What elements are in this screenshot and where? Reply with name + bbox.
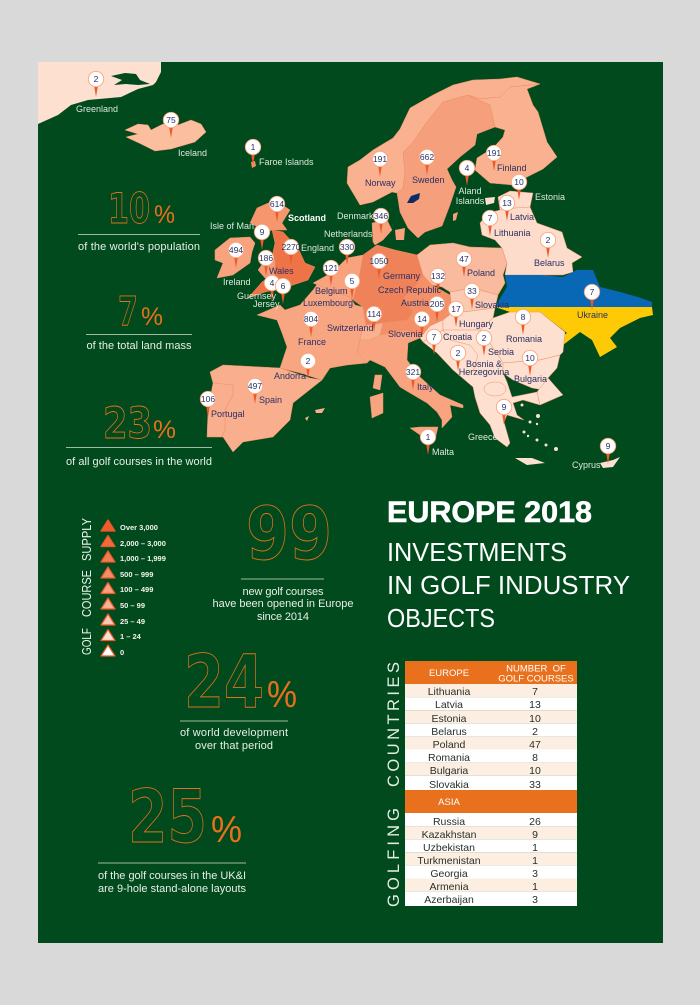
country labels: Finland: [497, 163, 527, 173]
pin: Malta 1: [420, 429, 436, 455]
country labels: Ukraine: [577, 310, 608, 320]
country labels: Hungary: [459, 319, 494, 329]
table rows: Europe: Lithuania: [428, 686, 470, 698]
pin: Poland 47: 47: [459, 254, 469, 264]
pin: Netherlands 330: [339, 239, 355, 265]
map of Europe: [38, 62, 653, 470]
vertical heading: golfing countries: COUNTRIES: [385, 662, 403, 787]
pin: Norway 191: [372, 151, 388, 177]
pin: Bulgaria 10: 10: [525, 353, 535, 363]
pin: Isle of Man 9: 9: [260, 227, 265, 237]
stat: 23% of all golf courses: of all golf courses in the world: [66, 456, 212, 468]
region: Italy: [305, 330, 463, 440]
table rows: Asia: Russia: [433, 816, 465, 828]
vertical heading: golfing countries: GOLFING: [385, 808, 403, 907]
pin: Ireland 494: 494: [229, 245, 243, 255]
region: Greenland: [38, 62, 161, 124]
region: Spain and Portugal: [207, 365, 322, 452]
country labels: England: [301, 243, 334, 253]
region: Romania and Moldova: [480, 312, 565, 363]
pin: Belarus 2: [540, 232, 556, 258]
country labels: Spain: [259, 395, 282, 405]
pin: Romania 8: [515, 309, 531, 335]
table header: Europe: EUROPE: [429, 668, 469, 679]
pin: Ukraine 7: [584, 284, 600, 310]
pin: Sweden 662: [419, 149, 435, 175]
region: France: [257, 283, 367, 380]
country labels: Estonia: [535, 192, 565, 202]
pin: Croatia 7: [426, 329, 442, 355]
country labels: Croatia: [443, 332, 472, 342]
stat: 10% of world's population: [78, 184, 200, 253]
table rows: Europe: 33: [529, 779, 541, 791]
table rows: Europe: 2: [532, 726, 538, 738]
stat: 25% of UK&I golf courses: are 9-hole stand-alone layouts: [98, 883, 246, 895]
stat: 99 new golf courses: [212, 492, 354, 623]
legend labels: 100 – 499: [120, 585, 153, 594]
pin: Malta 1: 1: [426, 432, 431, 442]
country labels: Denmark: [337, 211, 374, 221]
table rows: Europe: Latvia: [435, 699, 463, 711]
country labels: Aland: [458, 186, 482, 196]
country labels: Isle of Man: [210, 221, 254, 231]
table rows: Asia: 1: [532, 842, 538, 854]
country labels: Scotland: [288, 213, 326, 223]
country labels: Belarus: [534, 258, 565, 268]
pin: Aland Islands 4: [459, 160, 475, 186]
region: Hungary: [443, 308, 495, 332]
pin: France 804: [303, 311, 319, 337]
table rows: Europe: Estonia: [431, 713, 467, 725]
pin: Slovenia 14: [414, 311, 430, 337]
stat: 25% of UK&I golf courses: 25: [128, 775, 207, 860]
region: Poland: [417, 243, 507, 295]
pin: Latvia 13: [499, 195, 515, 221]
pin: Sweden 662: 662: [420, 152, 434, 162]
pin: Wales 186: 186: [259, 253, 273, 263]
stat: 99 new golf courses: 99: [246, 492, 332, 577]
legend labels: Over 3,000: [120, 523, 158, 532]
country labels: Greenland: [76, 104, 118, 114]
table rows: Europe: 8: [532, 752, 538, 764]
region: Greek islands: [515, 404, 558, 465]
table rows: Europe: 10: [529, 765, 541, 777]
table header: Asia: [405, 790, 577, 813]
stat: 7% of total land mass: of the total land mass: [86, 340, 192, 352]
table rows: Asia: Azerbaijan: [424, 894, 474, 906]
pin: Hungary 17: [448, 301, 464, 327]
country labels: Cyprus: [572, 460, 601, 470]
country labels: Belgium: [315, 286, 348, 296]
country labels: Sweden: [412, 175, 445, 185]
pin: Poland 47: [456, 251, 472, 277]
pin: Bulgaria 10: [522, 350, 538, 376]
region: Finland: [468, 84, 557, 185]
stat: 24% of world development: [180, 640, 297, 752]
pin: Croatia 7: 7: [432, 332, 437, 342]
pin: Denmark 346: [373, 208, 389, 234]
pin: Lithuania 7: [482, 210, 498, 236]
table rows: Asia: Uzbekistan: [423, 842, 475, 854]
table rows: Europe: Belarus: [431, 726, 467, 738]
pin: Greece 9: [496, 399, 512, 425]
legend title: COURSE: [80, 570, 94, 617]
pin: Belgium 121: 121: [324, 263, 338, 273]
title: [387, 496, 630, 633]
stat: 25% of UK&I golf courses: [98, 775, 246, 895]
pin: Belarus 2: 2: [546, 235, 551, 245]
country labels: Austria: [401, 298, 429, 308]
country labels: Malta: [432, 447, 454, 457]
stat: 99 new golf courses: new golf courses: [242, 586, 324, 598]
country labels: Faroe Islands: [259, 157, 314, 167]
pin: England 2270: 2270: [282, 242, 301, 252]
pin: Denmark 346: 346: [374, 211, 388, 221]
legend labels: 1,000 – 1,999: [120, 554, 166, 563]
country labels: Guernsey: [237, 291, 277, 301]
country labels: Bosnia &: [466, 359, 502, 369]
stat: 10% of world's population: 10: [108, 184, 150, 233]
pin: Luxembourg 5: 5: [350, 276, 355, 286]
pin: Germany 1050: [370, 253, 389, 279]
pin: Portugal 106: [200, 391, 216, 417]
pin: Czech Republic 132: [430, 268, 446, 294]
pin: Switzerland 114: 114: [367, 309, 381, 319]
region: Benelux: [313, 255, 363, 300]
table rows: Asia: Turkmenistan: [417, 855, 481, 867]
pin: Estonia 10: 10: [514, 177, 524, 187]
region: Sweden: [397, 95, 495, 238]
table: golfing countries: [405, 661, 577, 906]
table rows: Asia: 26: [529, 816, 541, 828]
pin: Belgium 121: [323, 260, 339, 286]
legend labels: 50 – 99: [120, 601, 145, 610]
pin: Spain 497: [247, 378, 263, 404]
pin: Aland Islands 4: 4: [465, 163, 470, 173]
pin: Austria 205: 205: [430, 299, 444, 309]
pin: Cyprus 9: 9: [606, 441, 611, 451]
table header: Europe: [405, 661, 577, 684]
country labels: Serbia: [488, 347, 514, 357]
pin: Finland 191: [486, 145, 502, 171]
country labels: Switzerland: [327, 323, 374, 333]
legend labels: 1 – 24: [120, 632, 142, 641]
country labels: Romania: [506, 334, 542, 344]
country labels: [76, 104, 608, 470]
pin: Cyprus 9: [600, 438, 616, 464]
stat: 10% of world's population: of the world's population: [78, 241, 200, 253]
pin: Italy 321: [405, 364, 421, 390]
pin: Portugal 106: 106: [201, 394, 215, 404]
table rows: Europe: Bulgaria: [430, 765, 468, 777]
pin: Greece 9: 9: [502, 402, 507, 412]
table header: Asia: ASIA: [438, 797, 460, 808]
stat: 99 new golf courses: have been opened in Europe: [212, 598, 354, 610]
title: OBJECTS: [387, 603, 495, 633]
stat: 23% of all golf courses: %: [153, 416, 176, 444]
region: Baltics and Belarus: [480, 191, 582, 275]
pin: Hungary 17: 17: [451, 304, 461, 314]
region: Aland Islands: [485, 197, 495, 205]
country labels: Netherlands: [324, 229, 373, 239]
pin: Greenland 2: [88, 71, 104, 97]
table rows: Europe: Romania: [428, 752, 470, 764]
pin: Italy 321: 321: [406, 367, 420, 377]
country labels: Greece: [468, 432, 498, 442]
pin: Slovakia 33: [464, 283, 480, 309]
country labels: Norway: [365, 178, 396, 188]
pin: Jersey 6: [275, 278, 291, 304]
legend labels: [120, 523, 166, 657]
table rows: Asia: 9: [532, 829, 538, 841]
pin: Slovenia 14: 14: [417, 314, 427, 324]
pin: Czech Republic 132: 132: [431, 271, 445, 281]
legend title: [80, 517, 94, 655]
stat: 24% of world development: 24: [184, 640, 264, 725]
pin: Serbia 2: [476, 330, 492, 356]
country labels: Herzegovina: [459, 367, 509, 377]
pin: Ukraine 7: 7: [590, 287, 595, 297]
country labels: Slovenia: [388, 329, 423, 339]
country labels: Ireland: [223, 277, 251, 287]
pin: England 2270: [282, 239, 301, 265]
country labels: Bulgaria: [514, 374, 547, 384]
table rows: Asia: Armenia: [429, 881, 469, 893]
pin: France 804: 804: [304, 314, 318, 324]
stat: 10% of world's population: %: [154, 201, 175, 229]
stat: 23% of all golf courses: 23: [103, 399, 152, 449]
country labels: Poland: [467, 268, 495, 278]
country labels: Latvia: [510, 212, 534, 222]
table rows: Asia: 1: [532, 881, 538, 893]
country labels: Jersey: [253, 299, 280, 309]
pin: Guernsey 4: 4: [270, 278, 275, 288]
country labels: France: [298, 337, 326, 347]
table rows: Europe: 47: [529, 739, 541, 751]
country labels: Islands: [456, 196, 485, 206]
vertical heading: golfing countries: [385, 662, 403, 907]
title: INVESTMENTS: [387, 537, 567, 567]
region: Denmark: [372, 220, 405, 245]
stat: 24% of world development: over that period: [195, 740, 273, 752]
region: Switzerland: [360, 323, 383, 340]
pin: Iceland 75: 75: [166, 115, 176, 125]
pin: Jersey 6: 6: [281, 281, 286, 291]
pin: Latvia 13: 13: [502, 198, 512, 208]
table rows: Europe: [405, 684, 577, 791]
pin: Finland 191: 191: [487, 148, 501, 158]
country labels: Wales: [269, 266, 294, 276]
title: IN GOLF INDUSTRY: [387, 570, 630, 600]
table rows: Asia: 3: [532, 868, 538, 880]
country labels: Lithuania: [494, 228, 531, 238]
pin: Bosnia and Herzegovina 2: 2: [456, 348, 461, 358]
pin: Scotland 614: [269, 196, 285, 222]
pin: Iceland 75: [163, 112, 179, 138]
table rows: Asia: [405, 813, 577, 906]
legend: golf course supply: [80, 517, 166, 657]
region: Wales: [258, 260, 275, 278]
region: Cyprus: [600, 457, 620, 468]
table rows: Europe: 10: [529, 713, 541, 725]
pin: Austria 205: [429, 296, 445, 322]
legend title: GOLF: [80, 628, 94, 655]
stat: 25% of UK&I golf courses: %: [211, 809, 242, 850]
pin: Andorra 2: [300, 353, 316, 379]
pin: Serbia 2: 2: [482, 333, 487, 343]
table rows: Europe: Slovakia: [429, 779, 469, 791]
legend title: SUPPLY: [80, 517, 94, 561]
pin: Greenland 2: 2: [94, 74, 99, 84]
pin: Ireland 494: [228, 242, 244, 268]
pin: Luxembourg 5: [344, 273, 360, 299]
table header: Europe: GOLF COURSES: [498, 674, 574, 684]
stat: 7% of total land mass: 7: [118, 289, 138, 335]
pin: Guernsey 4: [264, 275, 280, 301]
region: Ukraine: [495, 270, 653, 357]
legend triangles: [101, 520, 115, 656]
pin: Lithuania 7: 7: [488, 213, 493, 223]
pin: Germany 1050: 1050: [370, 256, 389, 266]
pin: Romania 8: 8: [521, 312, 526, 322]
pin: Bosnia and Herzegovina 2: [450, 345, 466, 371]
stat: 7% of total land mass: [86, 289, 192, 352]
country labels: Czech Republic: [378, 285, 442, 295]
country labels: Italy: [417, 382, 434, 392]
region: Slovakia: [450, 288, 498, 313]
region: Germany: [353, 245, 432, 325]
table rows: Asia: 3: [532, 894, 538, 906]
region: Slovenia: [420, 320, 443, 342]
country labels: Germany: [383, 271, 421, 281]
table header: Europe: NUMBER OF: [506, 664, 566, 674]
pin: Slovakia 33: 33: [467, 286, 477, 296]
pin: Netherlands 330: 330: [340, 242, 354, 252]
stat: 25% of UK&I golf courses: of the golf courses in the UK&I: [98, 870, 246, 882]
table rows: Europe: 13: [529, 699, 541, 711]
table rows: Europe: Poland: [433, 739, 466, 751]
region: Iceland: [125, 120, 206, 151]
region: Norway: [347, 77, 540, 205]
table rows: Europe: 7: [532, 686, 538, 698]
pin: Faroe Islands 1: 1: [251, 142, 256, 152]
country labels: Portugal: [211, 409, 245, 419]
legend labels: 2,000 – 3,000: [120, 539, 166, 548]
country labels: Andorra: [274, 371, 306, 381]
region: Scotland: [250, 200, 290, 235]
country labels: Luxembourg: [303, 298, 353, 308]
title: EUROPE 2018: [387, 496, 592, 529]
pin: Isle of Man 9: [254, 224, 270, 250]
region: Czech Republic and Austria: [380, 275, 452, 338]
region: Faroe Islands: [251, 161, 256, 168]
table rows: Asia: 1: [532, 855, 538, 867]
pin: Spain 497: 497: [248, 381, 262, 391]
stat: 24% of world development: of world development: [180, 727, 288, 739]
country labels: Slovakia: [475, 300, 509, 310]
country labels: Iceland: [178, 148, 207, 158]
legend labels: 25 – 49: [120, 617, 145, 626]
stat: 24% of world development: %: [267, 674, 297, 715]
pin: Andorra 2: 2: [306, 356, 311, 366]
table rows: Asia: Kazakhstan: [422, 829, 477, 841]
table rows: Asia: Georgia: [430, 868, 468, 880]
pin: Switzerland 114: [366, 306, 382, 332]
stat: 7% of total land mass: %: [141, 303, 163, 331]
pin: Scotland 614: 614: [270, 199, 284, 209]
legend labels: 500 – 999: [120, 570, 153, 579]
pin: Norway 191: 191: [373, 154, 387, 164]
region: England: [248, 230, 315, 298]
region: Ireland: [215, 237, 255, 278]
region: Balkans: [423, 330, 563, 447]
pin: Estonia 10: [511, 174, 527, 200]
pin: Faroe Islands 1: [245, 139, 261, 165]
stat: 23% of all golf courses: [66, 399, 212, 468]
pin: Wales 186: [258, 250, 274, 276]
panel: green poster background: [38, 62, 663, 943]
legend labels: 0: [120, 648, 124, 657]
stat: 99 new golf courses: since 2014: [257, 611, 309, 623]
